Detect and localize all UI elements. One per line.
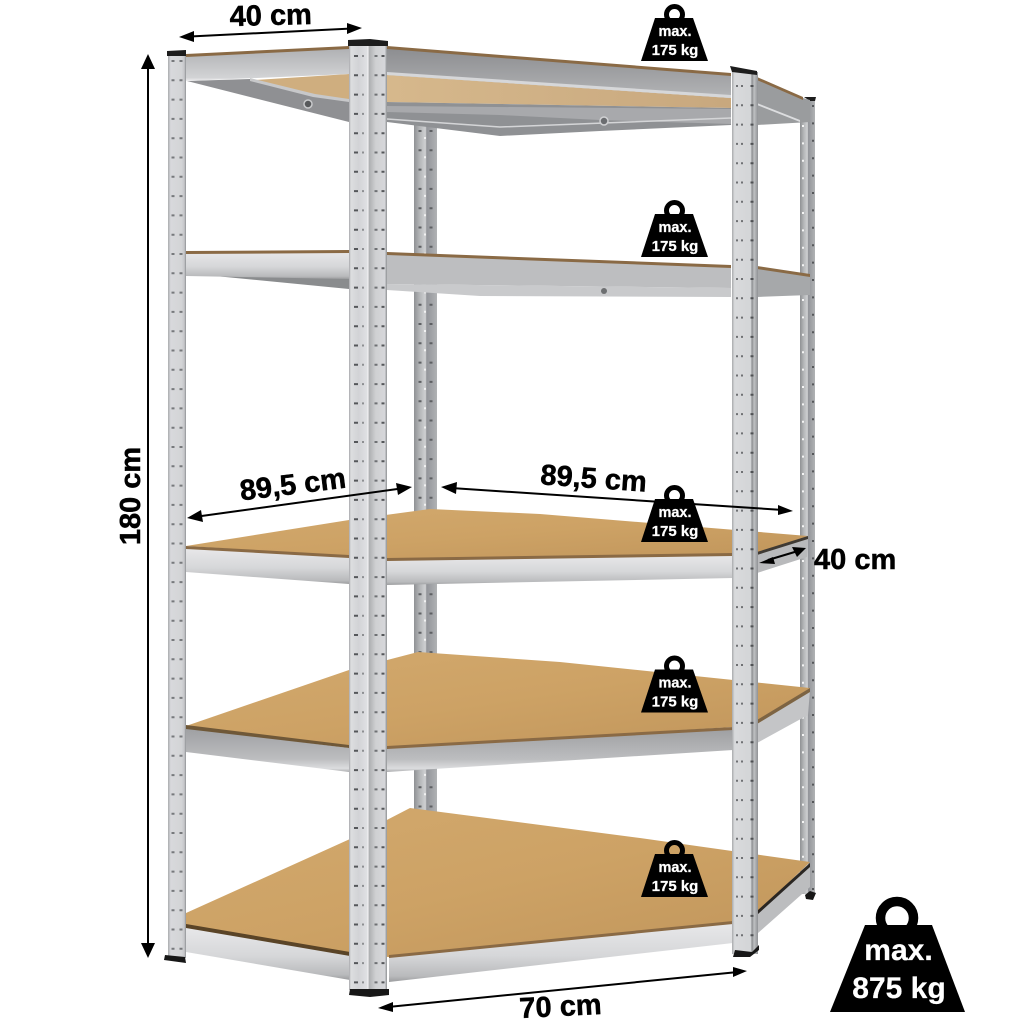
center beam <box>389 923 733 982</box>
right beam <box>757 267 810 297</box>
left beam <box>186 728 349 772</box>
right front post <box>730 66 759 957</box>
shelf 4 <box>186 652 810 772</box>
label: left side 89,5 cm: 89,5 cm <box>238 463 348 507</box>
center beam <box>387 555 733 585</box>
shelf 2 <box>186 250 810 297</box>
weight icon: total max. 875 kg <box>830 902 965 1012</box>
weight icon: total max. 875 kg: max. <box>864 934 933 967</box>
underside left <box>187 79 349 122</box>
center beam <box>387 48 731 98</box>
label: right depth 40 cm: 40 cm <box>814 544 896 576</box>
weight icon: shelf 2 max. 175 kg: 175 kg <box>652 238 698 255</box>
right beam <box>757 690 810 743</box>
weight icon: shelf 5 max. 175 kg: 175 kg <box>652 878 698 895</box>
foot <box>733 945 759 957</box>
shelf 5: bottom <box>186 808 810 982</box>
cap: right rear post <box>804 97 816 101</box>
center beam <box>387 253 731 288</box>
center beam <box>387 729 733 772</box>
weight icon: shelf 3 max. 175 kg <box>641 488 708 542</box>
left front post <box>164 50 186 963</box>
wood top <box>186 808 810 957</box>
weight icon: shelf 1 max. 175 kg: max. <box>658 24 692 40</box>
arrow: height 180 cm <box>141 54 155 958</box>
right beam <box>758 867 810 933</box>
rear beam center <box>387 102 731 136</box>
back corner post <box>414 122 437 812</box>
wood top <box>186 509 808 560</box>
right rear post <box>800 97 816 900</box>
foot <box>164 955 186 963</box>
weight icon: shelf 4 max. 175 kg: max. <box>658 676 692 692</box>
weight icon: shelf 3 max. 175 kg: max. <box>658 505 692 521</box>
arrow: front width 70 cm <box>378 967 747 1012</box>
cap <box>730 66 757 75</box>
weight icon: total max. 875 kg: 875 kg <box>852 972 946 1005</box>
underside wood center <box>387 75 731 108</box>
shelf 3 <box>186 509 808 585</box>
cap <box>167 50 186 56</box>
left beam <box>186 927 350 980</box>
right beam <box>757 78 810 125</box>
cap <box>348 39 388 46</box>
weight icon: shelf 3 max. 175 kg: 175 kg <box>652 523 698 540</box>
bolt <box>304 100 312 108</box>
shelf 1: top <box>186 46 810 136</box>
weight icon: shelf 4 max. 175 kg <box>641 658 708 712</box>
left beam <box>186 251 349 279</box>
weight icon: shelf 1 max. 175 kg: 175 kg <box>652 42 698 59</box>
weight icon: shelf 2 max. 175 kg <box>641 202 708 257</box>
lower lip center <box>387 284 731 297</box>
weight icon: shelf 5 max. 175 kg <box>641 842 708 897</box>
arrow: left side 89,5 cm <box>187 483 412 522</box>
weight icon: shelf 4 max. 175 kg: 175 kg <box>652 694 698 710</box>
underside left <box>215 276 349 289</box>
center front post <box>348 39 389 997</box>
right beam <box>757 538 808 573</box>
wood top <box>186 652 810 748</box>
left beam <box>186 548 349 584</box>
weight icon: shelf 5 max. 175 kg: max. <box>658 860 692 876</box>
weight icon: shelf 1 max. 175 kg <box>641 6 708 61</box>
label: height 180 cm: 180 cm <box>115 447 147 545</box>
left beam <box>186 47 349 81</box>
foot: right rear post <box>805 891 816 900</box>
label: right side 89,5 cm: 89,5 cm <box>539 459 648 499</box>
arrow: right depth 40 cm <box>759 547 806 564</box>
weight icon: shelf 2 max. 175 kg: max. <box>658 220 692 236</box>
arrow: top depth 40 cm <box>179 23 362 42</box>
arrow: right side 89,5 cm <box>441 482 793 515</box>
foot <box>349 989 389 997</box>
